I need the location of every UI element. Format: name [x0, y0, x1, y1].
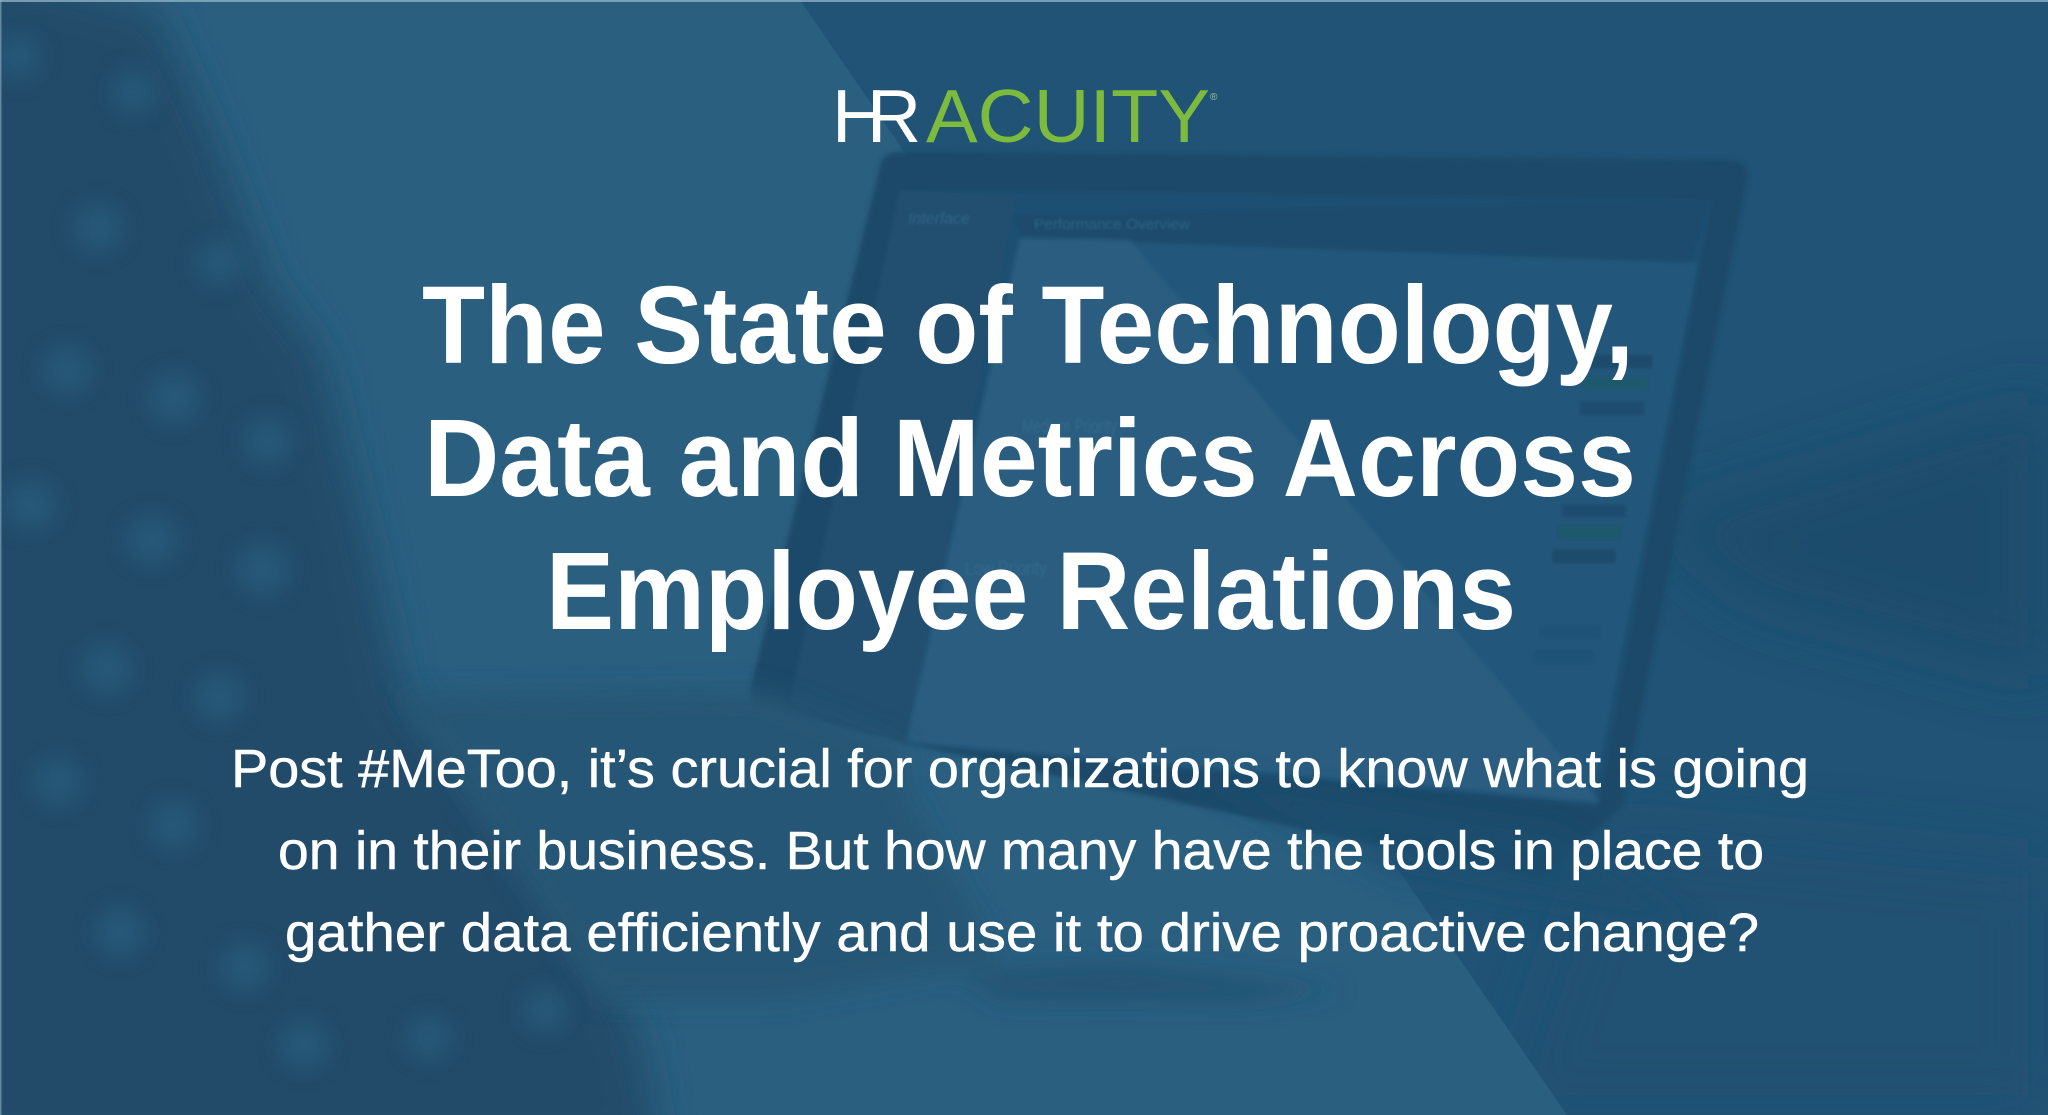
right-side desk shadow: [1500, 400, 2048, 1115]
lap and arm shadow, lower centre: [400, 690, 1700, 1002]
screen area left of the diagonal: [906, 238, 1600, 802]
laptop screen faint labels: Performance Overview: [1034, 216, 1190, 233]
title: The State of Technology,: [422, 264, 1634, 387]
frame edge highlight: [0, 0, 2048, 2]
laptop screen: [790, 190, 1712, 806]
title: Data and Metrics Across: [424, 397, 1636, 520]
laptop screen status buttons: [1534, 355, 1652, 664]
lighter diagonal wedge: [0, 0, 1567, 1115]
title: Employee Relations: [546, 530, 1516, 653]
intro text block: Post #MeToo, it’s crucial for organizations to know what is going: [231, 739, 1809, 799]
laptop screen faint labels: Interface: [908, 209, 970, 228]
logo: HR Acuity: HR: [832, 74, 921, 158]
person silhouette at left: [0, 0, 660, 1115]
laptop screen faint labels: [908, 209, 1190, 580]
logo: HR Acuity: ACUITY: [926, 74, 1210, 158]
intro text block: on in their business. But how many have the tools in place to: [278, 821, 1764, 881]
laptop sidebar: [790, 190, 1016, 745]
logo: HR Acuity: ®: [1210, 92, 1218, 103]
intro text block: gather data efficiently and use it to drive proactive change?: [285, 903, 1759, 963]
laptop: [750, 152, 1747, 880]
laptop screen faint labels: Low Priority: [965, 558, 1047, 580]
title: [422, 264, 1636, 653]
dots on person's patterned clothing: [0, 35, 567, 1069]
intro text block: [231, 739, 1809, 963]
laptop screen faint labels: Medium Priority: [1022, 416, 1117, 438]
